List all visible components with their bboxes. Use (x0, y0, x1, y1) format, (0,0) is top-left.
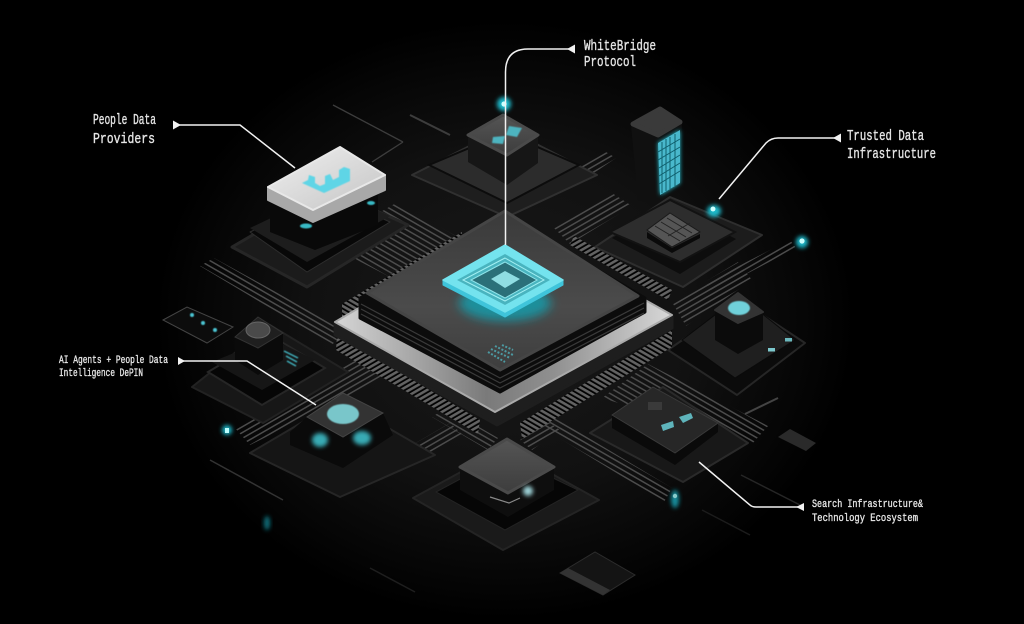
cube screen marks (506, 126, 522, 137)
leader line (180, 361, 316, 405)
tower glow (658, 130, 680, 195)
small lights (768, 348, 775, 352)
arrow (567, 44, 575, 54)
module: bottom cube (413, 439, 599, 550)
dark body (270, 180, 378, 250)
chip screen details (648, 402, 662, 410)
cube body (468, 135, 538, 185)
callout: Trusted Data Infrastructure (719, 128, 936, 199)
plate (192, 325, 348, 423)
cube body (460, 467, 554, 517)
module: Search Infrastructure (590, 387, 748, 482)
small light (785, 338, 792, 342)
callout: Trusted Data Infrastructure: Infrastructure (847, 146, 936, 163)
body glow marks (300, 224, 312, 228)
cyan stripes (284, 351, 298, 366)
label: AI Agents + People Data (59, 355, 168, 367)
module: glowing tower (631, 109, 682, 205)
callout: People Data Providers: Providers (93, 131, 155, 148)
cube light (523, 486, 533, 496)
arrow (833, 134, 841, 142)
dot marks (488, 345, 513, 362)
cube body (715, 310, 763, 354)
chip (647, 232, 700, 253)
module: Trusted Data Infrastructure (595, 197, 762, 287)
cube top (235, 317, 283, 348)
plate (590, 387, 748, 482)
main processor chip (335, 211, 672, 439)
module: left cube (163, 307, 348, 423)
leader line (719, 138, 838, 199)
arrow (796, 503, 804, 511)
side lights (312, 433, 328, 447)
chip body (612, 415, 718, 465)
label: Trusted Data (847, 128, 924, 145)
substrate side (335, 315, 672, 425)
tile rings (457, 254, 550, 305)
blue logo (302, 167, 350, 193)
glow dot (707, 205, 721, 217)
tower panel (658, 130, 680, 195)
circuit board glow (155, 20, 855, 620)
cube light (728, 301, 750, 315)
cyan tile top (443, 245, 563, 312)
layer stack (360, 215, 645, 392)
leader line (699, 462, 800, 507)
chip pins (336, 232, 672, 439)
raised layer (612, 205, 736, 274)
base plate (232, 190, 408, 287)
leader line (176, 125, 295, 168)
main light (327, 404, 359, 424)
glow dot (796, 236, 808, 248)
cube top (715, 293, 763, 323)
cube dial (246, 322, 270, 338)
module: People Data Providers (232, 147, 408, 287)
panel dots (190, 313, 217, 332)
cube body (235, 333, 283, 375)
glow dot (671, 490, 679, 508)
circuit traces (200, 105, 816, 595)
stack stripes (361, 303, 644, 388)
cube top face (468, 115, 538, 155)
label: People Data (93, 112, 156, 129)
tile center (491, 271, 520, 288)
callout: AI Agents + People Data Intelligence DePIN: Intelligence DePIN (59, 368, 143, 380)
callout: WhiteBridge Protocol: Protocol (584, 54, 636, 71)
lights panel (163, 307, 233, 343)
callout: AI Agents + People Data Intelligence DePIN (59, 355, 316, 405)
white block side (268, 175, 385, 222)
callout: Search Infrastructure & Technology Ecosystem: Technology Ecosystem (812, 513, 918, 525)
module: top cube (412, 115, 597, 217)
arrow (178, 357, 185, 365)
cube top (460, 439, 554, 493)
substrate light plate (335, 222, 672, 412)
module: cube with light (668, 293, 805, 395)
tower top (633, 109, 680, 135)
white block top (268, 147, 385, 210)
plate (250, 400, 435, 497)
cyan tile side (443, 280, 563, 317)
glow dot (264, 516, 270, 530)
chip top (307, 393, 383, 437)
chip body (290, 413, 393, 468)
plate (595, 197, 762, 287)
label: Search Infrastructure& (812, 499, 923, 511)
label: WhiteBridge (584, 38, 656, 55)
glow dot (497, 97, 511, 111)
glow dots (222, 97, 808, 530)
callout: People Data Providers (93, 112, 295, 168)
chip top (612, 387, 718, 453)
leader line (506, 49, 570, 245)
tile shadow glow (459, 285, 551, 321)
plate (412, 128, 597, 217)
tower panel grid (658, 134, 680, 193)
plate (668, 300, 805, 395)
module: AI Agents (250, 393, 435, 497)
glow dot (222, 425, 232, 435)
top plate (367, 211, 638, 370)
plate (413, 448, 599, 550)
callout: WhiteBridge Protocol (506, 38, 656, 245)
callout: Search Infrastructure & Technology Ecosystem (699, 462, 923, 525)
arrow (173, 120, 181, 130)
tower body (631, 122, 682, 205)
